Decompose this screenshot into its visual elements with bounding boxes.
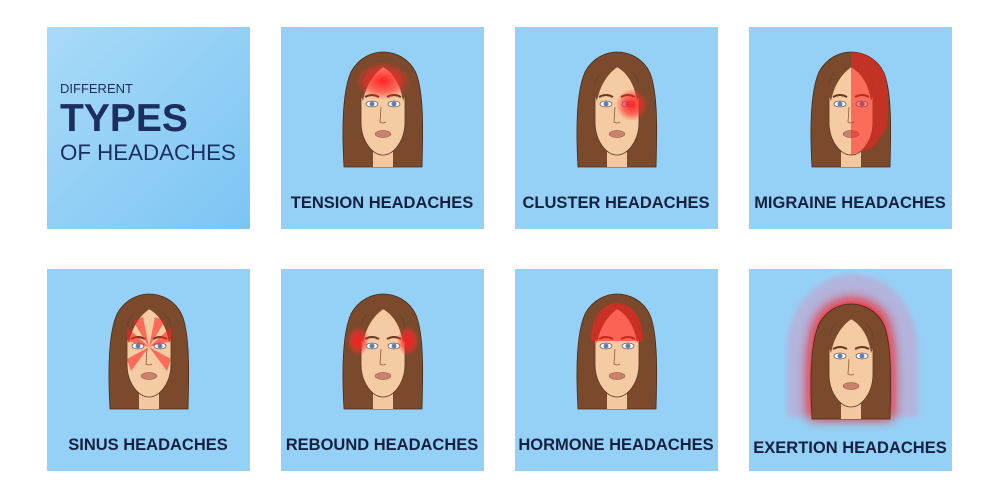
title text: TYPES <box>60 97 188 140</box>
face <box>811 304 891 419</box>
pain: half head <box>851 52 888 155</box>
pain: eye <box>616 89 648 121</box>
pain: forehead <box>355 62 411 100</box>
face <box>811 52 891 167</box>
panel: sinus <box>47 269 250 471</box>
face <box>577 52 657 167</box>
halo <box>787 274 918 419</box>
panel: migraine <box>749 27 952 229</box>
panel: rebound <box>281 269 484 471</box>
face <box>343 52 423 167</box>
panel: tension <box>281 27 484 229</box>
panel: exertion <box>749 269 952 471</box>
label: CLUSTER HEADACHES <box>522 194 710 212</box>
title text: OF HEADACHES <box>60 140 236 165</box>
face <box>577 294 657 409</box>
panel: cluster <box>515 27 718 229</box>
label: MIGRAINE HEADACHES <box>754 194 946 212</box>
pain: temples <box>347 326 419 356</box>
pain: sinus X <box>127 317 171 371</box>
panel: title <box>47 27 250 229</box>
pain: upper head <box>591 303 643 341</box>
face <box>343 294 423 409</box>
panel: hormone <box>515 269 718 471</box>
title text <box>60 81 236 165</box>
label: EXERTION HEADACHES <box>753 439 947 457</box>
title text: DIFFERENT <box>60 81 133 96</box>
label: SINUS HEADACHES <box>68 436 228 454</box>
label: TENSION HEADACHES <box>291 194 473 212</box>
label: HORMONE HEADACHES <box>518 436 714 454</box>
label: REBOUND HEADACHES <box>286 436 478 454</box>
face <box>109 294 189 409</box>
